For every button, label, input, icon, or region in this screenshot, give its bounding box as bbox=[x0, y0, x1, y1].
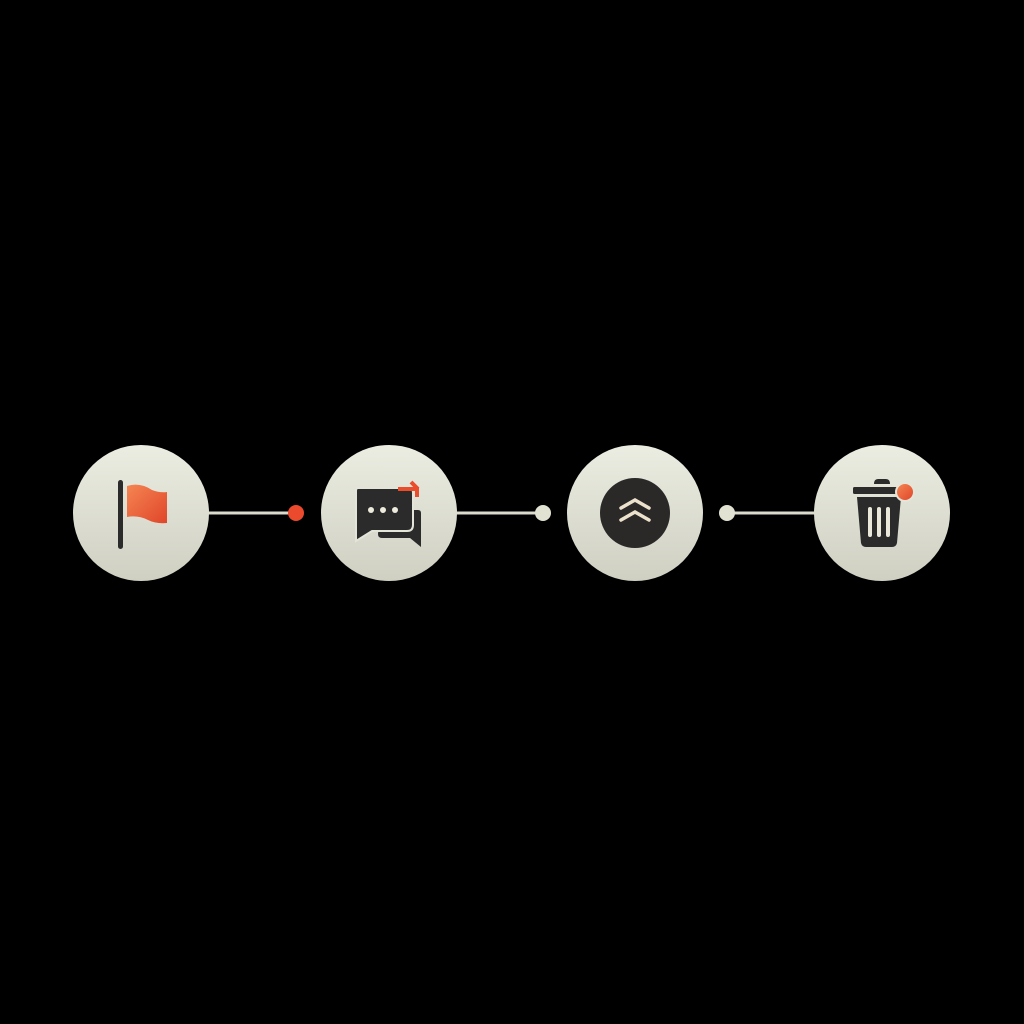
connector: 1 to 2 bbox=[205, 505, 304, 521]
icon: flag bbox=[118, 480, 167, 549]
node: chat bbox=[321, 445, 457, 581]
node: flag bbox=[73, 445, 209, 581]
node: trash bbox=[814, 445, 950, 581]
node: double chevron bbox=[567, 445, 703, 581]
connector: 2 to 3 bbox=[452, 505, 551, 521]
icon: chat bubbles with arrow bbox=[356, 482, 421, 547]
icon: trash can bbox=[853, 479, 915, 547]
icon: double chevron up bbox=[600, 478, 670, 548]
connector: 3 to 4 bbox=[719, 505, 818, 521]
